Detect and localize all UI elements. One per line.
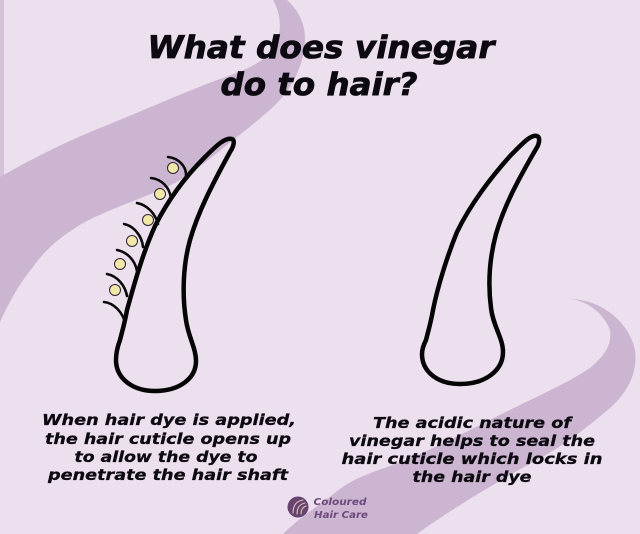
title: What does vinegar <box>148 30 496 66</box>
logo icon <box>288 496 308 518</box>
left caption <box>42 411 296 484</box>
cuticle scales <box>104 157 186 322</box>
dye particles <box>110 162 178 296</box>
right caption: the hair dye <box>412 468 532 486</box>
bottom background swoosh <box>283 299 636 534</box>
title <box>148 30 496 103</box>
left caption: penetrate the hair shaft <box>47 466 289 484</box>
right caption: vinegar helps to seal the <box>349 432 595 450</box>
top background swoosh <box>0 0 305 322</box>
left caption: When hair dye is applied, <box>42 411 296 429</box>
logo text <box>314 497 369 521</box>
left caption: the hair cuticle opens up <box>45 430 291 448</box>
logo text: Hair Care <box>314 510 369 521</box>
right caption: The acidic nature of <box>373 414 574 432</box>
left hair diagram: open cuticle with dye <box>104 139 234 391</box>
right hair diagram: sealed cuticle <box>422 136 539 384</box>
right caption <box>342 414 602 486</box>
logo text: Coloured <box>314 497 367 508</box>
right caption: hair cuticle which locks in <box>342 450 602 468</box>
logo: Coloured Hair Care <box>288 496 369 521</box>
hair shaft outline <box>116 139 234 391</box>
left caption: to allow the dye to <box>74 448 258 466</box>
title: do to hair? <box>220 67 418 103</box>
